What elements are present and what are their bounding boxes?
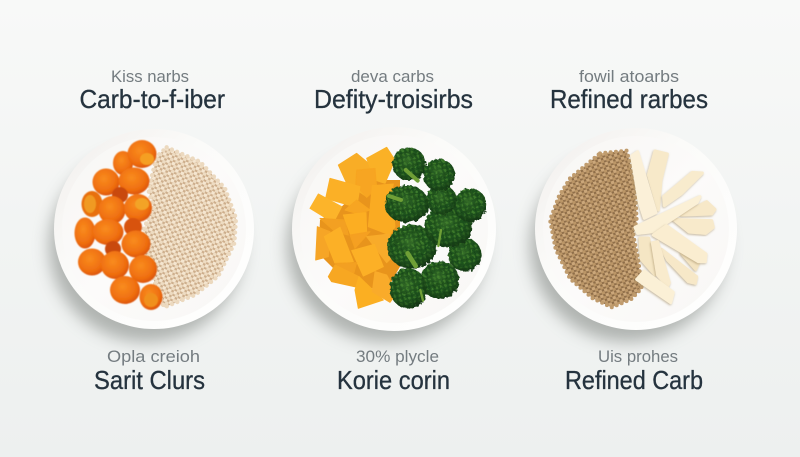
- caption: right column: Refined Carb: [565, 365, 703, 395]
- caption: middle column: 30% plycle: [356, 347, 439, 366]
- caption: middle column: [337, 347, 450, 395]
- caption: left column: [94, 347, 205, 395]
- heading: right column: fowil atoarbs: [579, 67, 679, 86]
- caption: middle column: Korie corin: [337, 365, 450, 395]
- lentils: [550, 151, 642, 307]
- white fries: [632, 151, 715, 303]
- tomatoes: [74, 140, 162, 310]
- heading: middle column: [314, 67, 473, 114]
- plate: lentils and white fries: [530, 128, 737, 342]
- heading: middle column: Defity-troisirbs: [314, 84, 473, 114]
- heading: right column: [550, 67, 708, 114]
- heading: left column: Carb-to-f-iber: [80, 84, 225, 114]
- squash cubes: [310, 147, 400, 308]
- caption: left column: Sarit Clurs: [94, 365, 205, 395]
- plate: tomatoes and pearl grains: [49, 129, 254, 342]
- caption: left column: Opla creioh: [107, 347, 200, 366]
- caption: right column: Uis prohes: [598, 347, 678, 366]
- heading: left column: [80, 67, 225, 114]
- pearl grains: [143, 147, 236, 307]
- heading: right column: Refined rarbes: [550, 84, 708, 114]
- plate: squash and broccoli: [287, 127, 496, 342]
- caption: right column: [565, 347, 703, 395]
- heading: left column: Kiss narbs: [111, 67, 189, 86]
- broccoli florets: [385, 147, 487, 308]
- heading: middle column: deva carbs: [351, 67, 434, 86]
